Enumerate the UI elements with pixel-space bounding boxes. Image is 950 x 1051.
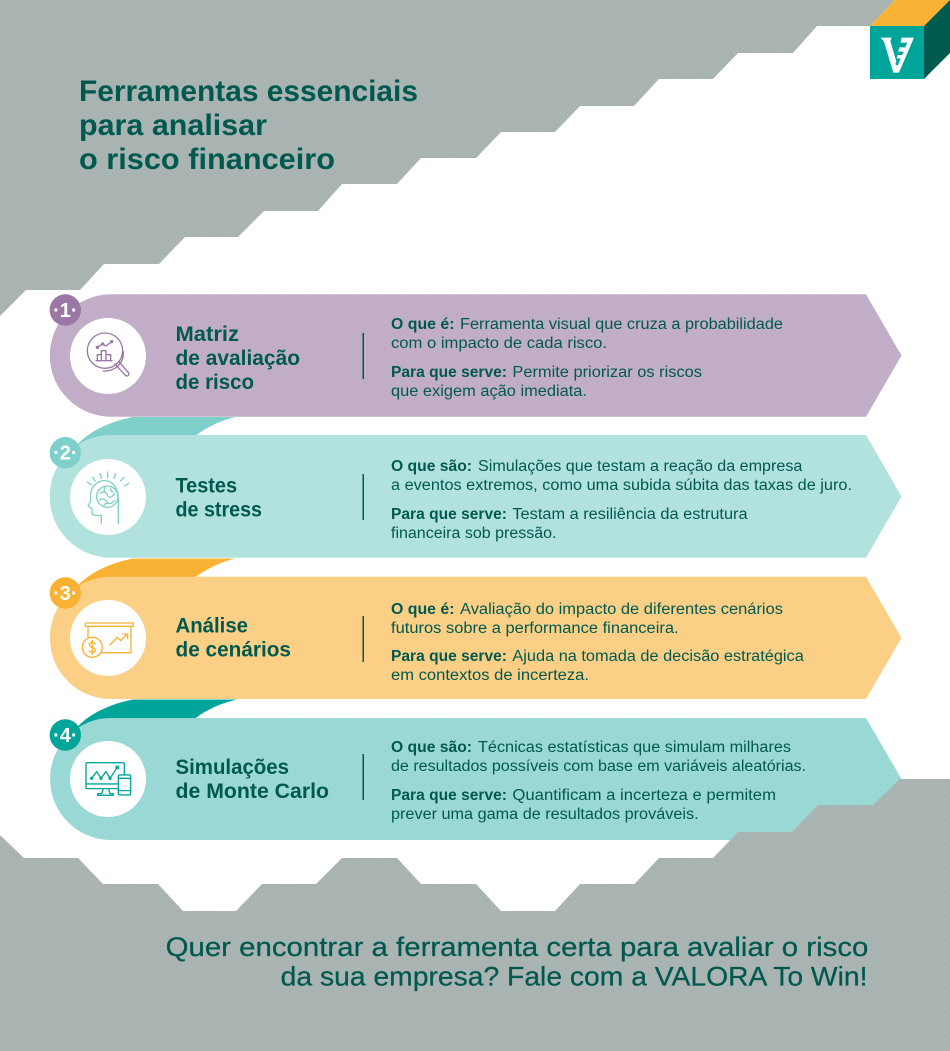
description: em contextos de incerteza. <box>391 667 589 684</box>
heading: Matriz <box>176 323 239 346</box>
description: Testam a resiliência da estrutura <box>512 506 748 523</box>
description: que exigem ação imediata. <box>391 383 587 400</box>
call to action: Quer encontrar a ferramenta certa para avaliar o risco <box>166 932 868 962</box>
number badge 2 <box>50 437 81 468</box>
divider <box>362 616 364 662</box>
title <box>79 75 418 176</box>
call to action: da sua empresa? Fale com a VALORA To Win! <box>281 962 868 992</box>
description: O que é: <box>391 316 454 333</box>
panel: testes de stress <box>50 435 902 558</box>
panel: análise de cenários <box>50 577 902 699</box>
panel: simulações de Monte Carlo <box>50 718 902 840</box>
description: simulações de Monte Carlo: Quantificam a incerteza e permitem <box>512 787 776 804</box>
description: simulações de Monte Carlo: O que são: <box>391 739 472 756</box>
number badge 4: ·4· <box>53 725 78 747</box>
icon: monitor and phone with chart <box>70 741 146 817</box>
description: simulações de Monte Carlo: Técnicas estatísticas que simulam milhares <box>478 739 791 756</box>
heading: simulações de Monte Carlo: de Monte Carlo <box>176 780 329 803</box>
bottom stepped grey background <box>0 779 950 1051</box>
description: Simulações que testam a reação da empresa <box>478 458 803 475</box>
description <box>391 316 783 400</box>
number badge 4 <box>50 719 81 751</box>
description: Permite priorizar os riscos <box>512 364 702 381</box>
heading: de risco <box>176 371 254 394</box>
heading: de avaliação <box>176 347 300 370</box>
description: O que é: <box>391 601 454 618</box>
description: Para que serve: <box>391 648 507 665</box>
icon: head with brain <box>70 459 146 535</box>
heading: de cenários <box>176 639 291 662</box>
ribbon swoosh 3 <box>76 558 235 588</box>
description: Ajuda na tomada de decisão estratégica <box>512 648 804 665</box>
divider <box>362 333 364 379</box>
description: com o impacto de cada risco. <box>391 335 607 352</box>
icon: magnifier with chart <box>70 318 146 394</box>
heading <box>176 323 300 394</box>
number badge 1: ·1· <box>53 300 78 322</box>
heading: de stress <box>176 499 262 522</box>
heading: Testes <box>176 475 237 498</box>
description: Ferramenta visual que cruza a probabilidade <box>460 316 783 333</box>
description: Para que serve: <box>391 364 507 381</box>
ribbon swoosh 4 <box>76 700 237 728</box>
description: financeira sob pressão. <box>391 525 556 542</box>
description: futuros sobre a performance financeira. <box>391 620 679 637</box>
heading <box>176 475 262 522</box>
number badge 3 <box>50 577 81 609</box>
description: O que são: <box>391 458 472 475</box>
title: Ferramentas essenciais <box>79 75 418 108</box>
description <box>391 458 852 542</box>
description <box>391 601 804 684</box>
icon: presentation board with coin <box>70 600 146 676</box>
heading: simulações de Monte Carlo: Simulações <box>176 756 289 779</box>
number badge 2: ·2· <box>53 443 78 465</box>
panel: matriz de avaliação de risco <box>50 294 902 417</box>
ribbon swoosh 2 <box>76 417 235 446</box>
heading: simulações de Monte Carlo <box>176 756 329 803</box>
logo cube <box>870 0 950 79</box>
call to action <box>166 932 868 992</box>
description: a eventos extremos, como uma subida súbita das taxas de juro. <box>391 477 852 494</box>
number badge 1 <box>50 294 81 326</box>
number badge 3: ·3· <box>53 583 78 605</box>
description: simulações de Monte Carlo: prever uma gama de resultados prováveis. <box>391 806 699 823</box>
title: o risco financeiro <box>79 143 335 176</box>
description: Para que serve: <box>391 506 507 523</box>
top stepped grey background <box>0 0 895 316</box>
description: simulações de Monte Carlo: de resultados possíveis com base em variáveis aleatórias. <box>391 758 806 775</box>
description: simulações de Monte Carlo: Para que serve: <box>391 787 507 804</box>
divider <box>362 474 364 520</box>
description: simulações de Monte Carlo <box>391 739 806 823</box>
title: para analisar <box>79 109 267 142</box>
heading: Análise <box>176 615 248 638</box>
divider <box>362 754 364 800</box>
heading <box>176 615 291 662</box>
description: Avaliação do impacto de diferentes cenários <box>460 601 783 618</box>
